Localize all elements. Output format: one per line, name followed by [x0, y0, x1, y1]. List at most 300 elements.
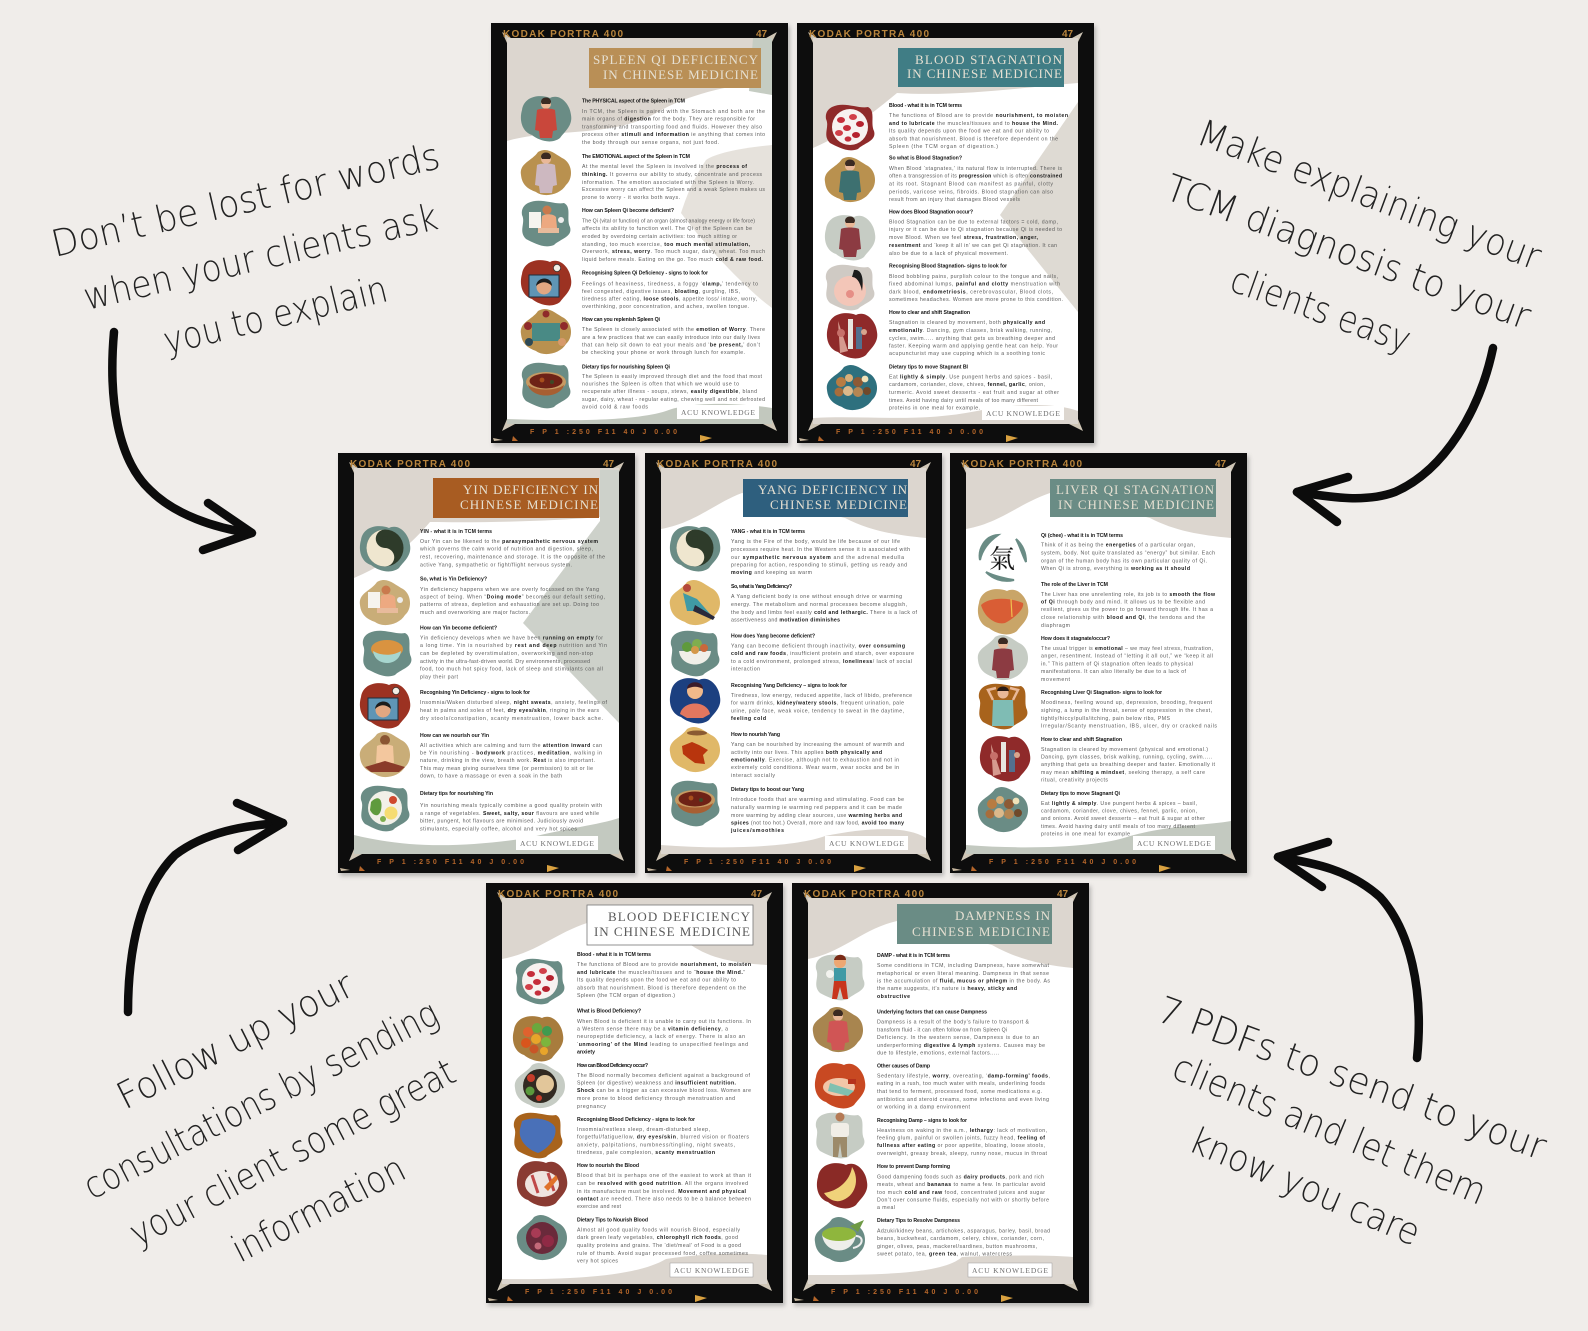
text block: dietary tips: rule of thumb. Avoid sugar processed food, coffee sometimes	[577, 1251, 748, 1257]
text block: blood: Blood - what it is in TCM terms	[889, 103, 962, 109]
text block: how to prevent damp: Good dampening foods such as dairy products, pork and rich	[877, 1174, 1044, 1180]
text block: how can spleen qi become deficient: affects its ability to function well. The Qi of the Spleen can be	[582, 226, 752, 232]
text block: dietary tips: stimulants, especially coffee, alcohol and very hot spices	[420, 826, 577, 832]
text block: what is blood stagnation	[889, 156, 1062, 203]
title: yin deficiency: YIN DEFICIENCY IN	[463, 482, 599, 497]
text block: blood	[577, 952, 751, 999]
text block: how can you replenish spleen qi: be checking your phone or work through lunch for example.	[582, 350, 745, 356]
text block: recognising blood deficiency	[577, 1117, 749, 1156]
text block: how does blood stagnation occur: resentment and ‘keep it all in’ we can get Qi stagnation. It can	[889, 243, 1057, 249]
text block: how can we nourish yin: How can we nourish our Yin	[420, 733, 489, 739]
text block: physical aspect: transforming and transporting food and fluids. However they also	[582, 124, 762, 130]
icon: woman holding head	[979, 684, 1027, 729]
text block: how does stagnation occur: manifestations. It can also literally be due to a lack of	[1041, 669, 1187, 675]
panel: blood deficiency: KODAK PORTRA 400	[498, 889, 618, 900]
text block: what is blood deficiency: anxiety	[577, 1050, 595, 1056]
icon: qi character	[980, 535, 1026, 581]
text block: what is blood stagnation: periods, varicose veins, fibroids. Blood stagnation can also	[889, 190, 1053, 196]
text block: dietary tips: times. Avoid having dairy until meals of too many different	[1041, 824, 1196, 830]
icon: yin yang	[670, 526, 720, 571]
text block: what is yin deficiency: much and overworking are major factors.	[420, 610, 530, 616]
text block: how does blood stagnation occur	[889, 210, 1062, 257]
text block: how to nourish blood: Blood that bit is perhaps one of the easiest to work at than it	[577, 1173, 752, 1179]
text block: dietary tips: recuperate after illness - soups, stews, easily digestible, bland	[582, 389, 757, 395]
panel: blood stagnation	[797, 23, 1096, 446]
text block: blood: Its quality depends upon the food we eat and our ability to	[889, 128, 1049, 134]
panel: yang deficiency: KODAK PORTRA 400	[657, 459, 777, 470]
title: liver qi stagnation: IN CHINESE MEDICINE	[1058, 497, 1214, 512]
text block: recognising spleen qi deficiency: overthinking, poor concentration, and aches, swollen tongue.	[582, 304, 749, 310]
icon: spices	[827, 365, 877, 410]
arrow: top right to liver panel	[1297, 348, 1493, 522]
text block: recognising liver qi stagnation: tightly/hiccy/pulls/itching, pain below ribs, PMS	[1041, 716, 1171, 722]
icon: matcha cup	[815, 1217, 865, 1262]
panel: yin deficiency: KODAK PORTRA 400	[350, 459, 470, 470]
button: acu knowledge	[516, 836, 598, 850]
icon: man standing	[816, 1112, 864, 1158]
panel: dampness: F P 1 :250 F11 40 J 0.00	[831, 1289, 978, 1296]
text block: dietary tips: The Spleen is easily improved through diet and the food that most	[582, 374, 763, 380]
button: acu knowledge	[982, 406, 1064, 420]
button: acu knowledge	[677, 405, 759, 419]
text block: what is yang deficiency	[731, 584, 918, 624]
text block: recognising blood deficiency: tiredness, pale complexion, scanty menstruation	[577, 1150, 715, 1156]
text block: what is yang deficiency: assertiveness and motivation diminishes	[731, 618, 840, 624]
text block: how to prevent damp	[877, 1164, 1049, 1211]
icon: red torso	[670, 727, 720, 772]
text block: how can we nourish yin: nature, drinking in the view, breath work. Rest is also important.	[420, 758, 595, 764]
text block: dietary tips: Yin nourishing meals typically combine a good quality protein with	[420, 803, 602, 809]
callout: 7 PDFs to send	[1152, 988, 1553, 1254]
text block: what is yang deficiency: So, what is Yang Deficiency?	[731, 584, 792, 590]
text block: emotional aspect: The EMOTIONAL aspect of the Spleen in TCM	[582, 154, 690, 160]
text block: what is blood deficiency: a Western sense there may be a vitamin deficiency, a	[577, 1026, 728, 1032]
text block: how can yin become deficient: play their part	[420, 674, 459, 680]
text block: dietary tips: naturally warming ie warming red peppers and it can be made	[731, 805, 902, 811]
text block: dietary tips: sugar, dairy, wheat - regular eating, chewing well and not defrosted	[582, 397, 765, 403]
text block: zheng qi: organ of the human body has its own particular quality of Qi.	[1041, 558, 1207, 564]
text block: recognising damp: Heaviness on waking in the a.m., lethargy: lack of motivation,	[877, 1128, 1047, 1134]
text block: recognising spleen qi deficiency: feel congested, digestive issues, bloating, gurgling, IBS,	[582, 289, 740, 295]
text block: how to clear and shift: anything that gets us breathing deeper and faster. Emotionally it	[1041, 762, 1216, 768]
text block: recognising liver qi stagnation: Recognising Liver Qi Stagnation- signs to look for	[1041, 690, 1162, 696]
text block: dietary tips: dark green leafy vegetables, chlorophyll rich foods, good	[577, 1235, 738, 1241]
text block: what is yin deficiency: aspect of being. When “Doing mode” becomes our default setting,	[420, 594, 605, 600]
arrow: bottom right to liver panel	[1278, 842, 1419, 1058]
text block: dietary tips: avoid cold & raw foods	[582, 404, 648, 410]
text block: blood: absorb that nourishment. Blood is therefore dependent on the	[889, 136, 1058, 142]
text block: how can we nourish yin: All activities which are calming and turn the attention inward can	[420, 743, 602, 749]
icon: yin yang	[360, 526, 410, 571]
text block: blood: The functions of Blood are to provide nourishment, to moisten	[889, 113, 1068, 119]
icon: meditating man	[360, 732, 410, 777]
text block: underlying factors: due to lifestyle, emotions, external factors.....	[877, 1050, 999, 1056]
icon: desk worker	[522, 201, 570, 246]
text block: dietary tips: quality proteins and grains. The ‘diet/meal’ of Food is a good	[577, 1243, 741, 1249]
text block: damp: is the accumulation of fluid, mucus or phlegm in the body. As	[877, 978, 1050, 984]
text block: how can you replenish spleen qi: How can you replenish Spleen Qi	[582, 317, 661, 323]
text block: what is blood deficiency	[577, 1008, 751, 1056]
button: acu knowledge: ACU KNOWLEDGE	[972, 1266, 1048, 1275]
text block: what is yang deficiency: A Yang deficient body is one without enough drive or warming	[731, 594, 902, 600]
text block: recognising liver qi stagnation	[1041, 690, 1217, 730]
text block: how to nourish yang: Yang can be nourished by increasing the amount of warmth and	[731, 742, 904, 748]
icon: woman with texture	[813, 1007, 863, 1052]
text block: role of the liver: The Liver has one unrelenting role, its job is to smooth the flow	[1041, 592, 1216, 598]
text block: recognising blood deficiency: forgetful/fatigue/low, dry eyes/skin, blurred vision or floaters	[577, 1134, 749, 1140]
text block: yin: which governs the calm world of nutrition and digestion, sleep,	[420, 546, 593, 552]
text block: how does yang become deficient: cold and raw foods, insufficient protein and starch, over exposure	[731, 651, 914, 657]
text block: how can blood deficiency occur: Shock can be a trigger as can excessive blood loss. Women are	[577, 1088, 751, 1094]
text block: how does yang become deficient: to a cold environment, prolonged stress, loneliness/ lack of social	[731, 659, 912, 665]
text block: dietary tips: Dietary tips to move Stagnant Qi	[1041, 791, 1121, 797]
text block: dietary tips	[877, 1218, 1050, 1258]
icon: bowl of food	[363, 631, 411, 676]
text block: how to nourish blood: contact are needed. There also needs to be a balance between	[577, 1196, 751, 1202]
text block: how to clear blood stagnation	[889, 310, 1058, 357]
text block: what is yang deficiency: energy. The metabolism and normal processes become sluggish,	[731, 602, 907, 608]
text block: damp	[877, 953, 1050, 1000]
text block: recognising damp: overweight, greasy break, sleepy, runny nose, mucus in throat	[877, 1151, 1048, 1157]
text block: blood: The functions of Blood are to provide nourishment, to moisten	[577, 962, 751, 968]
text block: role of the liver: diaphragm	[1041, 623, 1070, 629]
text block: recognising yang deficiency: for warm drinks, kidney/watery stools, frequent urination, pale	[731, 700, 904, 706]
icon: blood cells	[516, 959, 564, 1004]
text block: blood: Blood - what it is in TCM terms	[577, 952, 651, 958]
text block: how to clear blood stagnation: acupuncturist may use cupping which is a soothing tonic	[889, 351, 1045, 357]
text block: dietary tips: Dietary tips for nourishing Spleen Qi	[582, 364, 671, 370]
text block: dietary tips: Dietary tips to move Stagnant Bl	[889, 364, 969, 370]
text block: dietary tips: Almost all good quality foods will nourish Blood, especially	[577, 1228, 740, 1234]
text block: how to clear blood stagnation: Stagnation is cleared by movement, both physically and	[889, 320, 1045, 326]
text block: blood: and lubricate the muscles/tissues and to “house the Mind.”	[577, 970, 745, 976]
text block: how does stagnation occur: anger, resentment. Instead of “letting it all out,” we “keep it all	[1041, 654, 1213, 660]
text block: how to nourish blood: exercise and rest	[577, 1204, 622, 1210]
text block: how can blood deficiency occur	[577, 1063, 751, 1110]
button: acu knowledge	[825, 836, 908, 850]
text block: how does blood stagnation occur: also be due to a lack of physical movement.	[889, 251, 1008, 257]
button: acu knowledge: ACU KNOWLEDGE	[674, 1266, 749, 1275]
text block: how can blood deficiency occur: The Blood normally becomes deficient against a background of	[577, 1073, 751, 1079]
button: acu knowledge: ACU KNOWLEDGE	[1137, 839, 1211, 848]
icon: qi character: 氣	[989, 545, 1015, 574]
icon: organs / raw food	[517, 1161, 567, 1206]
text block: physical aspect: In TCM, the Spleen is paired with the Stomach and both are the	[582, 109, 765, 115]
text block: recognising spleen qi deficiency: Feelings of heaviness, tiredness, a foggy ‘clamp,’ tendency to	[582, 282, 758, 288]
panel: yin deficiency	[338, 453, 637, 876]
text block: what is yang deficiency: the body and limbs feel easily cold and lethargic. There is a lack of	[731, 610, 918, 616]
callout: 7 PDFs to send: 7 PDFs to send to your	[1152, 988, 1553, 1169]
text block: how can you replenish spleen qi	[582, 317, 765, 356]
text block: zheng qi: system, body. Not quite translated as “energy” but similar. Each	[1041, 550, 1215, 556]
text block: how can you replenish spleen qi: The Spleen is closely associated with the emotion of Worry. There	[582, 327, 765, 333]
arrow: top left to yin panel	[112, 332, 252, 550]
text block: damp: Some conditions in TCM, including Dampness, have somewhat	[877, 963, 1050, 969]
text block: how to nourish blood: in its manufacture must be involved. Movement and physical	[577, 1189, 747, 1195]
text block: how does stagnation occur	[1041, 636, 1213, 683]
text block: how to clear blood stagnation: cycles, swim..... anything that gets us breathing deeper and	[889, 336, 1055, 342]
text block: recognising spleen qi deficiency: tiredness after eating, loose stools, appetite loss/ intake, worry,	[582, 296, 757, 302]
text block: dietary tips: nourishes the Spleen is often that which we would use to	[582, 382, 739, 388]
button: acu knowledge	[968, 1263, 1052, 1277]
text block: recognising damp	[877, 1118, 1048, 1157]
text block: underlying factors: underperforming digestive & lymph systems. Causes may be	[877, 1043, 1045, 1049]
text block: other causes: Other causes of Damp	[877, 1064, 930, 1070]
text block: dietary tips: times. Avoid having dairy until meals of too many different	[889, 398, 1039, 404]
text block: how does stagnation occur: How does it stagnate/occur?	[1041, 636, 1110, 642]
text block: how to prevent damp: too much cold and raw food, concentrated juices and sugar	[877, 1190, 1045, 1196]
callout: 7 PDFs to send: know you care	[1183, 1119, 1427, 1254]
icon: person holding chest	[825, 157, 875, 202]
text block: how can yin become deficient	[420, 626, 607, 680]
title: spleen qi deficiency: IN CHINESE MEDICINE	[603, 67, 758, 82]
icon: soup pot	[522, 363, 570, 408]
text block: what is blood stagnation: at its root. Stagnant Blood can manifest as painful, clotty	[889, 182, 1053, 188]
text block: dietary tips: sweet potato, tea, green tea, walnut, watercress	[877, 1252, 1012, 1258]
text block: zheng qi	[1041, 533, 1215, 572]
text block: recognising blood stagnation: dark blood, endometriosis, cerebrovascular, Blood clots,	[889, 290, 1053, 296]
title: blood stagnation	[898, 48, 1064, 87]
text block: recognising liver qi stagnation: sighing, a lump in the throat, sense of oppression in the chest,	[1041, 708, 1212, 714]
text block: how to clear and shift: may mean shifting a mindset, seeking therapy, a self care	[1041, 770, 1205, 776]
text block: how to prevent damp: Don’t over consume fluids, especially not with or shortly before	[877, 1198, 1049, 1204]
panel: blood deficiency: F P 1 :250 F11 40 J 0.00	[525, 1289, 672, 1296]
panel: dampness: KODAK PORTRA 400	[804, 889, 924, 900]
text block: dietary tips: Dietary tips to boost our Yang	[731, 787, 804, 793]
text block: dietary tips: juices/smoothies	[730, 828, 784, 834]
panel: spleen qi deficiency	[491, 23, 790, 446]
text block: dietary tips: turmeric. Avoid sweet desserts - eat fruit and sugar at other	[889, 390, 1059, 396]
icon: yellow bananas	[817, 1163, 867, 1208]
text block: dietary tips: a range of vegetables. Sweet, salty, sour flavours are used while	[420, 811, 599, 817]
title: blood deficiency	[587, 905, 753, 945]
text block: dietary tips: spices (not too hot.) Overall, more and raw food, avoid too many	[731, 820, 904, 826]
text block: other causes: that tend to ferment, processed food, some medications e.g.	[877, 1089, 1042, 1095]
title: yin deficiency: CHINESE MEDICINE	[460, 497, 598, 512]
text block: dietary tips: ginger, olives, peas, mackerel/sardines, button mushrooms,	[877, 1244, 1037, 1250]
text block: recognising liver qi stagnation: Irregular/Scanty menstruation, IBS, ulcer, dry or cracked nails	[1041, 724, 1217, 730]
text block: recognising damp: feeling glum, painful or swollen joints, fuzzy head, feeling of	[877, 1136, 1045, 1142]
title: spleen qi deficiency	[589, 48, 761, 88]
text block: how to clear and shift: How to clear and shift Stagnation	[1041, 737, 1122, 743]
title: blood deficiency: IN CHINESE MEDICINE	[594, 924, 750, 939]
text block: physical aspect: main organs of digestion for the body. They are responsible for	[582, 116, 755, 122]
text block: underlying factors: Deficiency. In the western sense, Dampness is due to an	[877, 1035, 1039, 1041]
text block: recognising yang deficiency	[731, 683, 912, 722]
text block: how does yang become deficient	[731, 634, 914, 672]
text block: recognising yin deficiency: dry stools/constipation, scanty menstruation, lower back ache.	[420, 716, 603, 722]
text block: what is blood deficiency: ‘unmooring’ of the Mind leading to unspecified feelings and	[577, 1042, 748, 1048]
text block: emotional aspect	[582, 154, 765, 201]
text block: recognising blood stagnation: Blood bobbling pains, purplish colour to the tongue and nails,	[889, 274, 1058, 280]
text block: how can we nourish yin: be Yin nourishing - bodywork practices, meditation, walking in	[420, 750, 602, 756]
panel: spleen qi deficiency: 47	[756, 29, 768, 40]
text block: what is yin deficiency: So, what is Yin Deficiency?	[420, 576, 487, 582]
text block: how can yin become deficient: food, too much hot spicy food, lack of sleep and stimulants can all	[420, 666, 603, 672]
text block: how can we nourish yin: This may mean giving ourselves time (or permission) to sit or lie	[420, 766, 593, 772]
callout: make explaining TCM diagnosis easy: TCM diagnosis to your	[1160, 166, 1537, 338]
text block: emotional aspect: prone to worry - it works both ways.	[582, 195, 680, 201]
icon: boy with tissue	[816, 955, 864, 1000]
text block: how can you replenish spleen qi: that can help sit down to eat your meals and ‘be present,’ don’t	[582, 342, 761, 348]
text block: recognising yin deficiency: Insomnia/Waken disturbed sleep, night sweats, anxiety, feelings of	[420, 700, 608, 706]
text block: what is blood stagnation: When Blood ‘stagnates,’ its natural flow is interrupted. There is	[889, 166, 1062, 172]
text block: how can blood deficiency occur: pregnancy	[577, 1104, 606, 1110]
text block: dietary tips: proteins in one meal for example.	[889, 406, 980, 412]
text block: zheng qi: Think of it as being the energetics of a particular organ,	[1041, 542, 1195, 548]
text block: how does blood stagnation occur: move Blood. When we feel stress, frustration, anger,	[889, 235, 1039, 241]
text block: how can yin become deficient: can be depleted by overstimulation, overworking and non-stop	[420, 651, 593, 657]
text block: dietary tips: and onions. Avoid sweet desserts – eat fruit & sugar at other	[1041, 816, 1205, 822]
text block: yang: Yang is the Fire of the body, would be life because of our life	[731, 539, 900, 545]
panel: blood stagnation: 47	[1062, 29, 1074, 40]
text block: blood: absorb that nourishment. Blood is therefore dependent on the	[577, 986, 746, 992]
text block: dietary tips: Dietary Tips to Resolve Dampness	[877, 1218, 960, 1224]
text block: recognising blood stagnation: Recognising Blood Stagnation- signs to look for	[889, 264, 1007, 270]
text block: recognising yang deficiency: urine, pale face, weak voice, tendency to sweat in the daytime,	[731, 708, 904, 714]
text block: other causes: or working in a damp environment	[877, 1104, 971, 1110]
text block: how to nourish yang: extremely cold conditions. Wear warm, wear socks and be in	[731, 765, 899, 771]
text block: dietary tips: proteins in one meal for example	[1041, 832, 1130, 838]
text block: how to clear and shift: Dancing, gym classes, brisk walking, running, cycling, swim.....	[1041, 754, 1212, 760]
text block: underlying factors: Dampness is a result of the body’s failure to transport &	[877, 1020, 1030, 1026]
text block: how to nourish yang: interact socially	[731, 773, 775, 779]
text block: dietary tips	[889, 364, 1059, 412]
text block: blood: Spleen (the TCM organ of digestion.)	[577, 993, 675, 999]
text block: how can spleen qi become deficient: standing, too much exercise, too much mental stimulation,	[582, 242, 751, 248]
text block: emotional aspect: thinking. It governs our ability to study, concentrate and process	[582, 172, 762, 178]
text block: how to nourish yang: activity into our lives. This applies both physically and	[731, 750, 882, 756]
title: yang deficiency	[743, 479, 908, 517]
text block: yin: Our Yin can be likened to the parasympathetic nervous system	[420, 539, 598, 545]
text block: physical aspect: process other stimuli and information ie anything that comes into	[582, 132, 765, 138]
text block: recognising yang deficiency: Tiredness, low energy, reduced appetite, lack of libido, preference	[731, 693, 912, 699]
text block: recognising blood stagnation: fixed abdominal lumps, painful and clotty menstruation with	[889, 282, 1060, 288]
panel: liver qi stagnation: F P 1 :250 F11 40 J 0.00	[989, 859, 1136, 866]
title: dampness: DAMPNESS IN	[955, 908, 1051, 923]
text block: how can we nourish yin: down, to have a massage or even a soak in the bath	[420, 774, 562, 780]
text block: how to nourish blood: How to nourish the Blood	[577, 1163, 639, 1169]
text block: how to clear blood stagnation: faster. Keeping warm and applying gentle heat can help. Your	[889, 344, 1058, 350]
text block: underlying factors	[877, 1010, 1045, 1056]
text block: how can blood deficiency occur: How can Blood Deficiency occur?	[577, 1063, 648, 1069]
text block: how to prevent damp: How to prevent Damp forming	[877, 1164, 950, 1170]
text block: dietary tips: Eat lightly & simply. Use pungent herbs & spices – basil,	[1041, 801, 1197, 807]
text block: how can yin become deficient: a long time. Yin is nourished by rest and deep nutrition and Yin	[420, 643, 607, 649]
text block: how to nourish yang: How to nourish Yang	[731, 732, 780, 738]
button: acu knowledge	[1133, 836, 1215, 850]
icon: salad bowl	[361, 786, 409, 831]
callout: follow up your consultations: your client some great	[122, 1050, 462, 1255]
panel: spleen qi deficiency: KODAK PORTRA 400	[503, 29, 623, 40]
text block: how can spleen qi become deficient: The Qi (vital or function) of an organ (almost analogy energy or life force)	[582, 218, 755, 224]
icon: tired face at screen	[521, 260, 571, 305]
text block: recognising blood deficiency: anxiety, palpitations, numbness/tingling, night sweats,	[577, 1142, 735, 1148]
text block: other causes	[877, 1064, 1050, 1110]
text block: dietary tips: Eat lightly & simply. Use pungent herbs and spices - basil,	[889, 374, 1052, 380]
title: liver qi stagnation: LIVER QI STAGNATION	[1056, 482, 1215, 497]
text block: dietary tips: cardamom, coriander, clove, chives, fennel, garlic, onion,	[889, 382, 1045, 388]
text block: what is yin deficiency: patterns of stress, depletion and exhaustion are set up. Doing too	[420, 602, 599, 608]
icon: food plate	[515, 1063, 565, 1108]
text block: dietary tips: bitter, pungent, hot flavours are minimised. Judiciously avoid	[420, 818, 583, 824]
text block: dietary tips	[730, 787, 904, 834]
icon: dancers	[827, 313, 877, 358]
text block: role of the liver	[1041, 582, 1216, 629]
text block: what is blood stagnation: result from an injury that damages Blood vessels	[889, 197, 1020, 203]
text block: yang: moving and keeping us warm	[731, 570, 812, 576]
callout: follow up your consultations: information	[225, 1147, 412, 1271]
text block: role of the liver: of Qi through body and mind. It allows us to be flexible and	[1041, 600, 1205, 606]
text block: recognising damp: fullness after eating or poor appetite, bloating, loose stools,	[877, 1143, 1045, 1149]
callout: follow up your consultations: consultations by sending	[77, 992, 445, 1208]
text block: how can yin become deficient: Yin deficiency develops when we have been running on empty for	[420, 636, 603, 642]
text block: how can spleen qi become deficient: eroded by overdoing certain activities: too much sitting or	[582, 234, 737, 240]
text block: how can blood deficiency occur: more prone to blood deficiency through menstruation and	[577, 1096, 735, 1102]
text block: blood: and to lubricate the muscles/tissues and to house the Mind.	[889, 121, 1059, 127]
text block: how can yin become deficient: How can Yin become deficient?	[420, 626, 497, 632]
text block: how does stagnation occur: movement	[1041, 677, 1071, 683]
text block: dietary tips: Dietary tips for nourishing Yin	[420, 791, 493, 797]
title: blood stagnation: IN CHINESE MEDICINE	[907, 66, 1062, 81]
text block: how can yin become deficient: activity in the ultra-fast-driven world. Dry environments, processed	[420, 659, 590, 665]
text block: underlying factors: transform fluid - it can often follow on from Spleen Qi	[877, 1028, 1007, 1034]
text block: blood: Its quality depends upon the food we eat and our ability to	[577, 978, 736, 984]
panel: blood deficiency: 47	[751, 889, 763, 900]
callout: don't be lost for words: Don’t be lost for words	[47, 135, 444, 266]
text block: dietary tips	[1041, 791, 1205, 838]
icon: woman pain	[825, 215, 875, 260]
text block: what is blood deficiency: What is Blood Deficiency?	[577, 1008, 641, 1014]
panel: yin deficiency: F P 1 :250 F11 40 J 0.00	[377, 859, 524, 866]
panel: liver qi stagnation: 47	[1215, 459, 1227, 470]
text block: how to nourish blood: can be resolved with good nutrition. All the organs involved	[577, 1181, 748, 1187]
text block: recognising blood stagnation	[889, 264, 1063, 303]
button: acu knowledge: ACU KNOWLEDGE	[520, 839, 594, 848]
text block: recognising liver qi stagnation: Moodiness, feeling wound up, depression, brooding, frequent	[1041, 700, 1213, 706]
text block: recognising yin deficiency: Recognising Yin Deficiency - signs to look for	[420, 690, 530, 696]
text block: physical aspect	[582, 98, 765, 146]
text block: dietary tips: Dietary Tips to Nourish Blood	[577, 1218, 648, 1224]
text block: dietary tips	[420, 791, 602, 832]
text block: dietary tips	[577, 1218, 748, 1264]
text block: recognising blood deficiency: Insomnia/restless sleep, dream-disturbed sleep,	[577, 1127, 710, 1133]
text block: how can you replenish spleen qi: are a few practices that we can easily introduce into our daily lives	[582, 335, 760, 341]
button: acu knowledge: ACU KNOWLEDGE	[986, 409, 1060, 418]
icon: salad	[671, 631, 719, 676]
text block: recognising blood deficiency: Recognising Blood Deficiency - signs to look for	[577, 1117, 695, 1123]
text block: how to clear blood stagnation: How to clear and shift Stagnation	[889, 310, 970, 316]
text block: dietary tips: beans, buckwheat, cardamom, celery, chive, coriander, corn,	[877, 1236, 1044, 1242]
icon: tired face at screen	[360, 683, 410, 728]
text block: what is blood deficiency: neuropeptide deficiency, a lack of energy. There is also an	[577, 1034, 745, 1040]
icon: desk worker	[360, 580, 410, 625]
panel: blood stagnation: KODAK PORTRA 400	[809, 29, 929, 40]
text block: yang: preparing for action, responding to stimuli, getting us ready and	[731, 562, 907, 568]
icon: spices	[978, 787, 1028, 832]
text block: zheng qi: Qi (chee) - what it is in TCM terms	[1041, 533, 1123, 539]
text block: how does blood stagnation occur: injury or it can be due to Qi stagnation because Qi is needed to	[889, 227, 1062, 233]
text block: zheng qi: When Qi is strong, everything is working as it should	[1041, 566, 1190, 572]
text block: recognising yang deficiency: Recognising Yang Deficiency – signs to look for	[731, 683, 847, 689]
text block: yin: active Yang, sympathetic or fight/flight nervous system.	[420, 562, 572, 568]
title: liver qi stagnation	[1050, 479, 1216, 517]
text block: other causes: Sedentary lifestyle, worry, overeating, ‘damp-forming’ foods,	[877, 1074, 1050, 1080]
button: acu knowledge: ACU KNOWLEDGE	[829, 839, 904, 848]
text block: blood: Spleen (the TCM organ of digestion.)	[889, 144, 998, 150]
text block: how to nourish blood	[577, 1163, 752, 1210]
text block: yang	[731, 529, 910, 576]
